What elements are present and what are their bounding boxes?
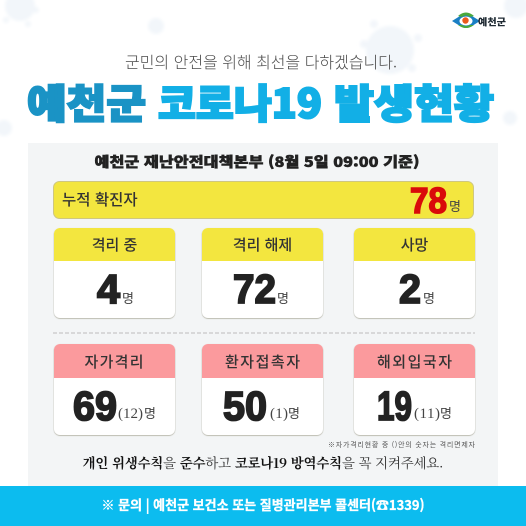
card: patient contacts: 명 — [288, 403, 300, 422]
logo: Yecheon-gun — [452, 12, 506, 28]
hygiene message: 개인 위생수칙을 준수하고 코로나19 방역수칙을 꼭 지켜주세요. — [82, 452, 444, 472]
card: patient contacts: 환자접촉자 — [225, 351, 300, 372]
card: deaths: 2 — [399, 266, 421, 312]
card: released: 격리 해제 — [233, 234, 292, 255]
logo: Yecheon-gun: 예천군 — [478, 14, 506, 28]
card: overseas arrivals: (11) — [414, 406, 440, 422]
title — [27, 72, 494, 130]
card: overseas arrivals: 19 — [377, 383, 412, 429]
title: 코로나19 — [158, 72, 322, 130]
card: in quarantine: 격리 중 — [92, 234, 137, 255]
cumulative confirmed bar: 78 — [410, 180, 447, 221]
card: in quarantine: 4 — [97, 266, 120, 312]
card: self-quarantine: 자가격리 — [84, 351, 144, 372]
card: released: 명 — [277, 288, 289, 307]
card: self-quarantine — [54, 344, 175, 435]
card: self-quarantine: 명 — [144, 403, 156, 422]
cumulative confirmed bar: 누적 확진자 — [62, 188, 138, 210]
card: overseas arrivals: 해외입국자 — [377, 351, 452, 372]
virus decorations — [0, 0, 526, 136]
footnote: ※자가격리현황 중 ()안의 숫자는 격리면제자 — [328, 440, 476, 450]
card: deaths — [354, 228, 475, 318]
card: deaths: 명 — [423, 288, 435, 307]
card: self-quarantine: (12) — [118, 406, 143, 422]
card: patient contacts: (1) — [270, 406, 288, 422]
panel: status — [28, 143, 498, 486]
title: 발생현황 — [334, 72, 494, 130]
card: self-quarantine: 69 — [73, 383, 117, 429]
card: deaths: 사망 — [401, 234, 428, 255]
cumulative confirmed bar — [54, 180, 474, 221]
footer bar: ※ 문의 | 예천군 보건소 또는 질병관리본부 콜센터(☎1339) — [102, 494, 424, 514]
card: overseas arrivals — [354, 344, 475, 435]
card: patient contacts — [202, 344, 323, 435]
footer bar — [0, 486, 526, 526]
card: overseas arrivals: 명 — [440, 403, 452, 422]
panel heading: 예천군 재난안전대책본부 (8월 5일 09:00 기준) — [94, 152, 420, 172]
title: 예천군 — [27, 72, 146, 130]
card: in quarantine: 명 — [122, 288, 134, 307]
subtitle: 군민의 안전을 위해 최선을 다하겠습니다. — [125, 49, 397, 73]
cumulative confirmed bar: 명 — [449, 196, 461, 215]
card: released: 72 — [233, 266, 276, 312]
card: released — [202, 228, 323, 318]
card: patient contacts: 50 — [223, 383, 267, 429]
card: in quarantine — [54, 228, 175, 318]
